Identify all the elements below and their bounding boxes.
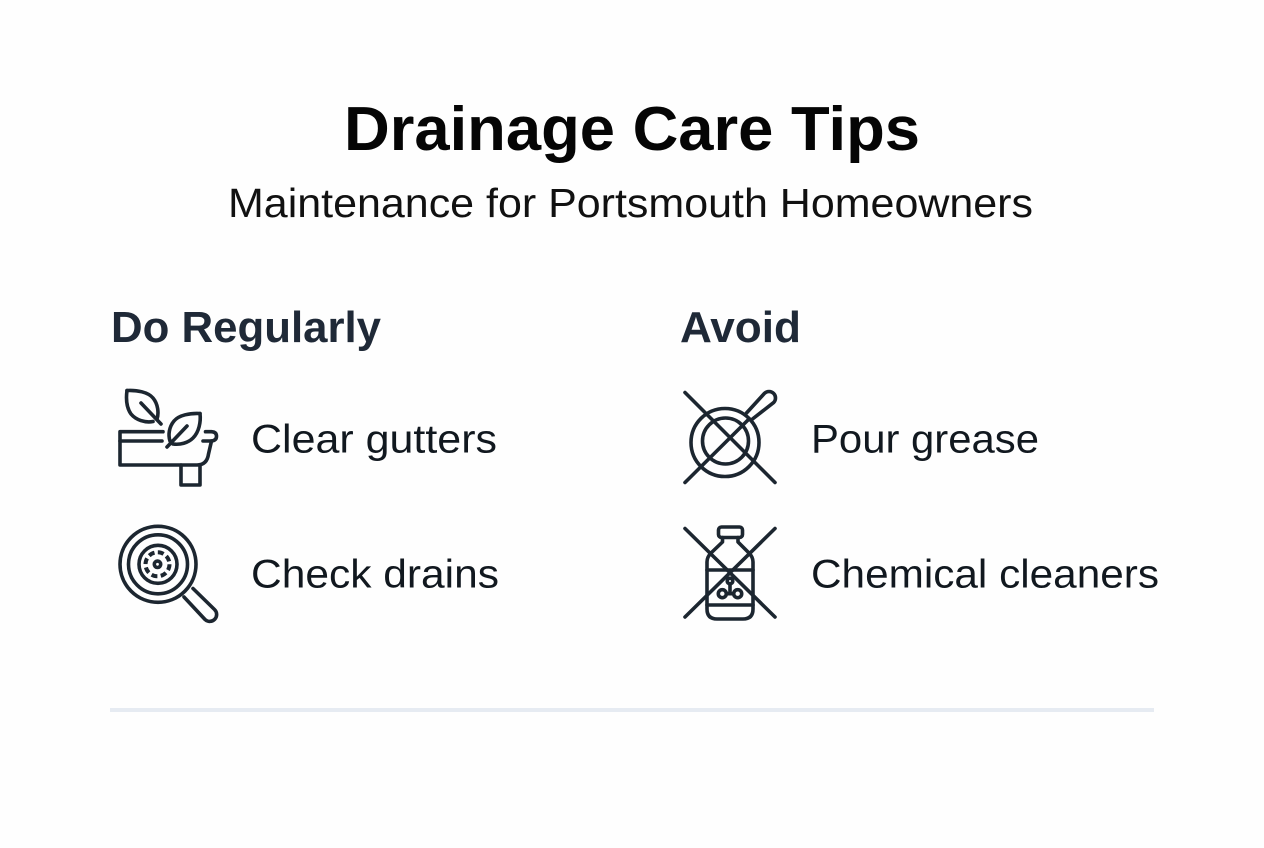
- title: Drainage Care Tips: [344, 95, 920, 164]
- icon: crossed-out pan: [685, 391, 776, 482]
- heading: do regularly: Do Regularly: [111, 303, 382, 352]
- icon: crossed-out chemical bottle: [685, 527, 775, 619]
- footer divider: [110, 708, 1154, 712]
- subtitle: Maintenance for Portsmouth Homeowners: [228, 180, 1033, 226]
- heading: avoid: Avoid: [680, 303, 801, 352]
- label: chemical cleaners: Chemical cleaners: [811, 552, 1159, 596]
- label: check drains: Check drains: [251, 552, 499, 596]
- label: clear gutters: Clear gutters: [251, 418, 497, 462]
- label: pour grease: Pour grease: [811, 418, 1039, 462]
- icon: gutter with leaves: [120, 390, 216, 485]
- panel: avoid: [680, 303, 1159, 619]
- icon: drain with magnifier: [120, 526, 217, 621]
- panel: do regularly: [111, 303, 499, 621]
